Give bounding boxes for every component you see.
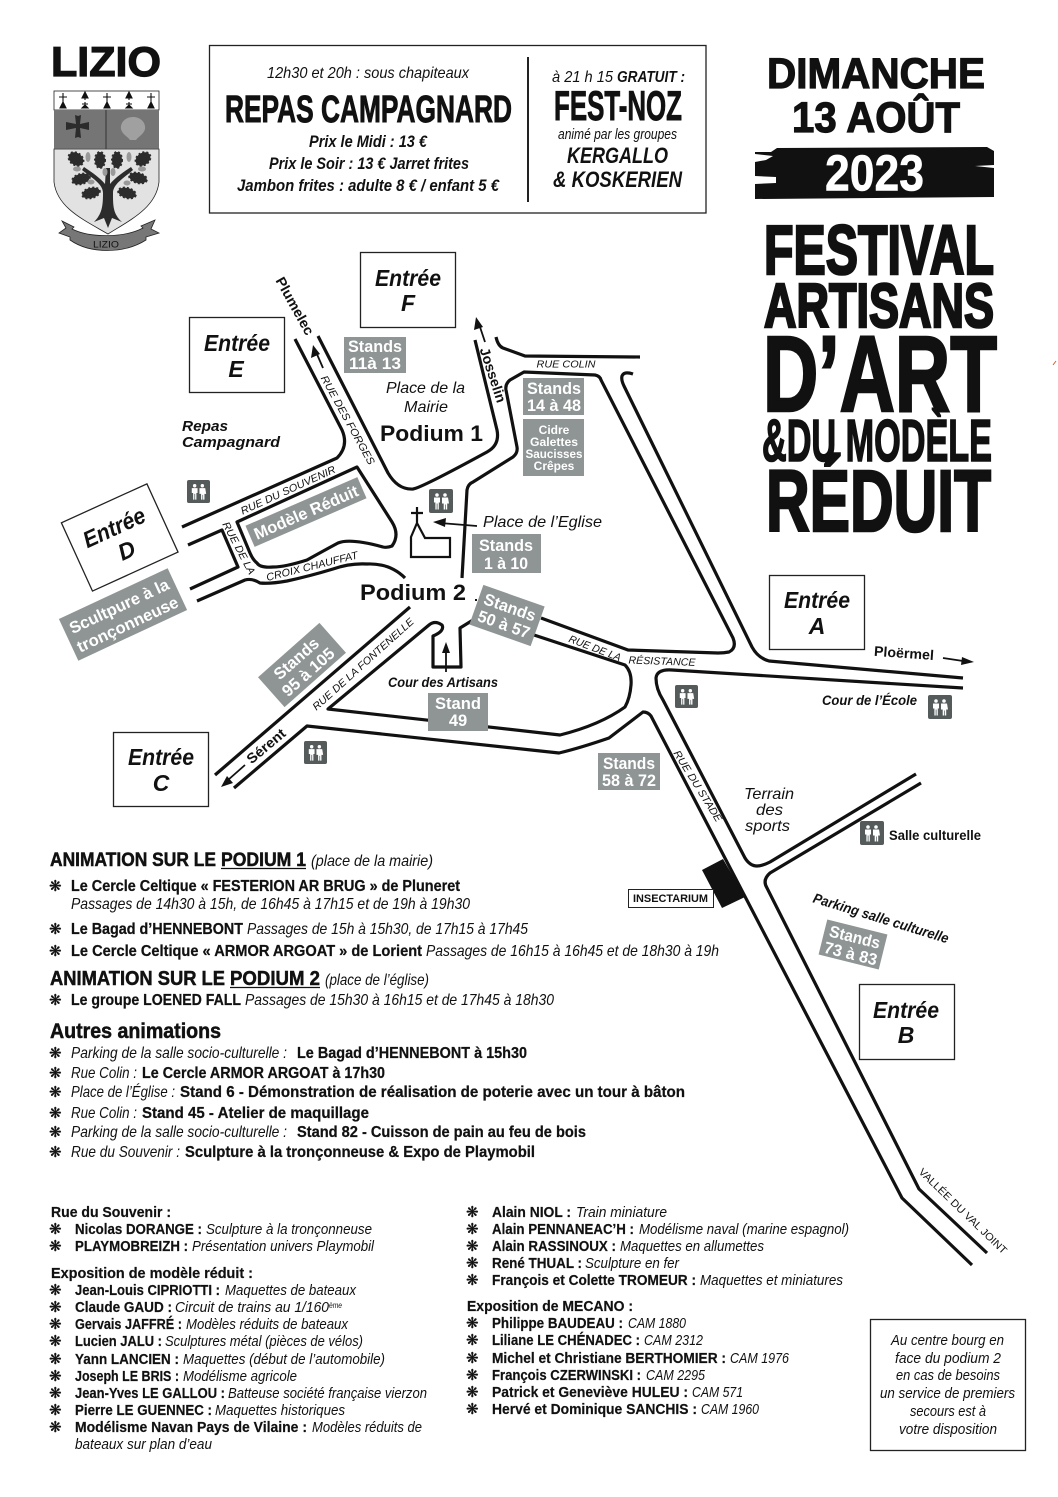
callout: first aid: Au centre bourg en — [890, 1333, 1004, 1349]
direction labels: Ploërmel — [874, 643, 934, 663]
list: exposition de mecano: Patrick et Geneviève HULEU : — [492, 1385, 688, 1401]
section: autres animations: Rue du Souvenir : — [71, 1144, 180, 1161]
food stand: Crêpes — [534, 459, 575, 473]
section: autres animations: Le Cercle ARMOR ARGOAT à 17h30 — [142, 1065, 385, 1082]
stands 14 à 48 — [523, 378, 584, 415]
list: exposition de modèle réduit: ❋ — [49, 1367, 62, 1385]
list: rue du souvenir: ❋ — [49, 1237, 62, 1255]
street names: CROIX CHAUFFAT — [265, 549, 361, 584]
list: exposition de modèle réduit: ❋ — [49, 1401, 62, 1419]
list: exhibitors continued: Modélisme naval (marine espagnol) — [639, 1222, 849, 1238]
food stand — [523, 419, 584, 476]
section: autres animations: Rue Colin : — [71, 1065, 137, 1082]
list: exposition de modèle réduit: bateaux sur plan d’eau — [75, 1437, 212, 1453]
section: autres animations: ❋ — [49, 1123, 62, 1141]
list: exposition de modèle réduit: Circuit de trains au 1/160 — [175, 1300, 329, 1316]
section: animation podium 1: ❋ — [49, 942, 62, 960]
year banner: 2023 — [825, 144, 924, 202]
list: exhibitors continued: ❋ — [466, 1237, 479, 1255]
arrow: ploërmel — [943, 657, 974, 665]
list: rue du souvenir: Nicolas DORANGE : — [75, 1222, 202, 1238]
icon: coat of arms — [54, 91, 159, 250]
list: exposition de modèle réduit: Sculptures métal (pièces de vélos) — [165, 1334, 363, 1350]
list: exposition de mecano: CAM 571 — [692, 1385, 743, 1401]
list: exhibitors continued: François et Colette TROMEUR : — [492, 1273, 696, 1289]
section: autres animations: ❋ — [49, 1083, 62, 1101]
list: exposition de modèle réduit: Modélisme agricole — [183, 1369, 297, 1385]
stand 49: Stand — [435, 695, 481, 713]
insectarium: INSECTARIUM — [633, 893, 708, 905]
list: exposition de mecano: Philippe BAUDEAU : — [492, 1316, 623, 1332]
list: exhibitors continued: Train miniature — [576, 1205, 667, 1221]
entrance A: A — [808, 613, 825, 639]
arrow: cour des artisans — [442, 642, 450, 672]
stands 58 à 72 — [598, 753, 660, 790]
stand 49: 49 — [449, 712, 467, 730]
entrance E — [190, 318, 284, 392]
place labels: Podium 1 — [380, 421, 483, 446]
food stand: Galettes — [530, 435, 578, 449]
list: rue du souvenir: Rue du Souvenir : — [51, 1205, 171, 1221]
stands 50 à 57 — [469, 585, 545, 646]
section: autres animations: ❋ — [49, 1044, 62, 1062]
list: exposition de modèle réduit: ❋ — [49, 1350, 62, 1368]
stands 14 à 48: 14 à 48 — [527, 397, 581, 415]
icon: toilets rue du stade — [675, 685, 698, 708]
list: exposition de modèle réduit: Pierre LE GUENNEC : — [75, 1403, 212, 1419]
list: exposition de modèle réduit: ❋ — [49, 1281, 62, 1299]
panel: repas campagnard and fest-noz: Prix le Midi : 13 € — [309, 132, 428, 151]
section: autres animations: Stand 82 - Cuisson de pain au feu de bois — [297, 1124, 586, 1141]
date: 13 AOÛT — [792, 93, 960, 142]
year banner — [755, 144, 994, 202]
insectarium — [628, 859, 745, 908]
date: DIMANCHE — [767, 50, 985, 98]
section: animation podium 1: (place de la mairie) — [311, 853, 433, 870]
list: exposition de mecano: CAM 1960 — [701, 1402, 759, 1418]
direction labels — [243, 274, 934, 767]
list: exposition de modèle réduit: ❋ — [49, 1332, 62, 1350]
place labels: Parking salle culturelle — [811, 890, 951, 946]
list: exposition de mecano — [466, 1299, 790, 1418]
entrance E: Entrée — [204, 330, 270, 356]
stands 73 à 83: 73 à 83 — [822, 939, 879, 969]
icon: toilets cour de l'école — [928, 695, 952, 719]
town name: LIZIO — [51, 38, 161, 85]
section: animation podium 1: Le Cercle Celtique « ARMOR ARGOAT » de Lorient — [71, 943, 423, 960]
list: exhibitors continued: Maquettes et miniatures — [700, 1273, 843, 1289]
section: animation podium 1: Passages de 14h30 à 15h, de 16h45 à 17h15 et de 19h à 19h30 — [71, 896, 470, 913]
street names: RUE DES FORGES — [318, 374, 377, 467]
list: exhibitors continued: René THUAL : — [492, 1256, 582, 1272]
arrow: place de l'église — [433, 518, 477, 527]
stands 1 à 10: Stands — [479, 537, 533, 555]
entrance D: D — [114, 535, 140, 566]
callout: first aid: face du podium 2 — [895, 1351, 1001, 1367]
section: autres animations: Stand 6 - Démonstration de réalisation de poterie avec un tour à bâton — [180, 1084, 685, 1101]
icon: toilets salle culturelle — [860, 821, 884, 845]
section: animation podium 2: ANIMATION SUR LE — [50, 968, 225, 990]
list: exhibitors continued: Alain PENNANEAC’H : — [492, 1222, 634, 1238]
list: exposition de modèle réduit: Jean-Yves LE GALLOU : — [75, 1386, 225, 1402]
entrance D: Entrée — [79, 502, 150, 553]
sculpture à la tronçonneuse: tronçonneuse — [74, 594, 182, 656]
list: exposition de mecano: CAM 1880 — [628, 1316, 686, 1332]
list: rue du souvenir: Sculpture à la tronçonneuse — [206, 1222, 372, 1238]
entrance E: E — [228, 356, 244, 382]
stands 73 à 83 — [818, 920, 887, 970]
section: animation podium 1: Passages de 15h à 15h30, de 17h15 à 17h45 — [247, 921, 528, 938]
street names: RUE DU STADE — [671, 748, 725, 825]
panel: repas campagnard and fest-noz: FEST-NOZ — [554, 82, 682, 129]
section: animation podium 1: ❋ — [49, 877, 62, 895]
food stand: Cidre — [539, 423, 570, 437]
list: exposition de modèle réduit: Modélisme Navan Pays de Vilaine : — [75, 1420, 307, 1436]
place labels: Podium 2 — [360, 580, 466, 605]
section: animation podium 2 — [49, 968, 554, 1009]
panel: repas campagnard and fest-noz: KERGALLO — [567, 143, 668, 168]
list: exposition de mecano: Michel et Christiane BERTHOMIER : — [492, 1351, 726, 1367]
ribbon — [59, 220, 159, 250]
section: autres animations: ❋ — [49, 1143, 62, 1161]
list: exposition de mecano: ❋ — [466, 1331, 479, 1349]
list: exposition de modèle réduit: Batteuse société française vierzon — [228, 1386, 427, 1402]
food stand: Saucisses — [526, 447, 583, 461]
arrow: josselin — [474, 317, 485, 342]
street names: RÉSISTANCE — [628, 654, 697, 669]
panel: repas campagnard and fest-noz: Prix le Soir : 13 € Jarret frites — [269, 154, 469, 173]
section: autres animations: ❋ — [49, 1064, 62, 1082]
section: animation podium 1: Passages de 16h15 à 16h45 et de 18h30 à 19h — [426, 943, 719, 960]
place labels: Terrain — [744, 786, 794, 803]
section: autres animations: ❋ — [49, 1104, 62, 1122]
place labels: sports — [745, 818, 790, 835]
panel: repas campagnard and fest-noz: 12h30 et 20h : sous chapiteaux — [267, 65, 470, 82]
section: animation podium 2: Passages de 15h30 à 16h15 et de 17h45 à 18h30 — [245, 992, 554, 1009]
section: animation podium 2: ❋ — [49, 991, 62, 1009]
list: exhibitors continued: Alain NIOL : — [492, 1205, 571, 1221]
street names: RUE DE LA — [567, 633, 623, 664]
entrance B: B — [898, 1022, 914, 1048]
date — [767, 50, 985, 142]
list: exhibitors continued: ❋ — [466, 1203, 479, 1221]
panel: repas campagnard and fest-noz: REPAS CAMPAGNARD — [225, 89, 512, 131]
stands 11 à 13 — [344, 337, 406, 373]
callout: first aid: un service de premiers — [880, 1386, 1015, 1402]
list: exposition de mecano: CAM 1976 — [730, 1351, 790, 1367]
roads — [182, 336, 987, 1265]
list: exposition de modèle réduit: Maquettes (début de l’automobile) — [183, 1352, 385, 1368]
panel: repas campagnard and fest-noz — [210, 46, 706, 213]
place labels: Place de l’Eglise — [483, 514, 602, 531]
list: exposition de modèle réduit: ❋ — [49, 1298, 62, 1316]
icon: toilets sérent — [304, 741, 327, 764]
place labels: Repas — [182, 418, 228, 435]
list: exposition de mecano: Liliane LE CHÉNADEC : — [492, 1332, 640, 1349]
entrance A — [770, 576, 864, 650]
street names — [219, 359, 1010, 1257]
modèle réduit: Modèle Réduit — [251, 482, 362, 544]
list: exposition de modèle réduit — [49, 1266, 427, 1453]
list: exposition de modèle réduit: ❋ — [49, 1315, 62, 1333]
stands 95 à 105: Stands — [271, 634, 323, 684]
place labels: Campagnard — [182, 434, 281, 451]
stands 14 à 48: Stands — [527, 380, 581, 398]
icon: toilets repas — [187, 480, 210, 503]
list: exposition de modèle réduit: ❋ — [49, 1384, 62, 1402]
entrance C: Entrée — [128, 744, 194, 770]
list: exposition de modèle réduit: Maquettes historiques — [215, 1403, 345, 1419]
stands 95 à 105 — [258, 623, 346, 707]
section: animation podium 1: Le Cercle Celtique « FESTERION AR BRUG » de Pluneret — [71, 878, 461, 895]
list: exposition de modèle réduit: Exposition de modèle réduit : — [51, 1266, 253, 1282]
place labels: Cour de l’École — [822, 692, 917, 708]
list: rue du souvenir: PLAYMOBREIZH : — [75, 1239, 188, 1255]
street names: RUE COLIN — [537, 359, 596, 371]
arrow: plumelec — [311, 345, 323, 368]
place labels: Cour des Artisans — [388, 674, 498, 690]
panel: repas campagnard and fest-noz: & KOSKERIEN — [553, 167, 683, 192]
section: autres animations — [49, 1020, 685, 1161]
list: exhibitors continued: Alain RASSINOUX : — [492, 1239, 616, 1255]
callout: first aid: en cas de besoins — [896, 1368, 1000, 1384]
section: animation podium 1 — [49, 850, 719, 960]
list: exhibitors continued: Maquettes en allumettes — [620, 1239, 764, 1255]
entrance A: Entrée — [784, 587, 850, 613]
stands 73 à 83: Stands — [827, 923, 882, 953]
entrance B: Entrée — [873, 997, 939, 1023]
stands 50 à 57: 50 à 57 — [475, 607, 532, 642]
list: exposition de modèle réduit: ème — [329, 1301, 342, 1310]
icon: coat of arms: LIZIO — [93, 240, 119, 250]
panel: repas campagnard and fest-noz: animé par les groupes — [558, 127, 677, 143]
stands 1 à 10: 1 à 10 — [484, 555, 528, 573]
section: autres animations: Parking de la salle socio-culturelle : — [71, 1045, 287, 1062]
section: animation podium 2: PODIUM 2 — [230, 968, 320, 990]
section: autres animations: Parking de la salle socio-culturelle : — [71, 1124, 287, 1141]
place labels: Mairie — [404, 399, 448, 416]
stands 50 à 57: Stands — [481, 590, 538, 625]
section: autres animations: Place de l’Église : — [71, 1082, 175, 1101]
list: exhibitors continued: ❋ — [466, 1220, 479, 1238]
panel: repas campagnard and fest-noz: à 21 h 15 — [552, 69, 613, 86]
direction labels: Plumelec — [273, 274, 318, 338]
entrance D — [61, 484, 178, 591]
list: exposition de modèle réduit: ❋ — [49, 1418, 62, 1436]
street names: RUE DU SOUVENIR — [239, 464, 338, 517]
list: exhibitors continued: ❋ — [466, 1271, 479, 1289]
list: exhibitors continued: Sculpture en fer — [585, 1256, 680, 1272]
list: exposition de mecano: Hervé et Dominique SANCHIS : — [492, 1402, 697, 1418]
list: rue du souvenir — [49, 1205, 375, 1255]
section: animation podium 1: ANIMATION SUR LE — [50, 850, 216, 871]
entrance C: C — [153, 770, 170, 796]
list: exposition de modèle réduit: Lucien JALU : — [75, 1334, 162, 1350]
callout: first aid: votre disposition — [899, 1422, 997, 1438]
sculpture à la tronçonneuse: Scultpure à la — [67, 575, 173, 638]
stands 1 à 10 — [472, 534, 541, 573]
stands 11 à 13: 11à 13 — [349, 355, 401, 373]
place labels: Place de la — [386, 380, 465, 397]
list: exposition de modèle réduit: Joseph LE BRIS : — [75, 1369, 179, 1385]
list: exposition de mecano: François CZERWINSKI : — [492, 1368, 641, 1384]
list: exposition de modèle réduit: Modèles réduits de — [312, 1420, 422, 1436]
list: exposition de modèle réduit: Modèles réduits de bateaux — [186, 1317, 349, 1333]
direction labels: Josselin — [477, 345, 510, 405]
callout: first aid: secours est à — [910, 1404, 986, 1420]
direction labels: Sérent — [243, 725, 289, 767]
panel: repas campagnard and fest-noz: Jambon frites : adulte 8 € / enfant 5 € — [237, 176, 500, 195]
stand 49 — [428, 693, 488, 731]
list: exposition de mecano: ❋ — [466, 1349, 479, 1367]
section: autres animations: Stand 45 - Atelier de maquillage — [142, 1105, 369, 1122]
section: autres animations: Sculpture à la tronçonneuse & Expo de Playmobil — [185, 1144, 535, 1161]
list: rue du souvenir: ❋ — [49, 1220, 62, 1238]
panel: repas campagnard and fest-noz: GRATUIT : — [617, 69, 685, 86]
street map — [59, 252, 1010, 1265]
section: animation podium 2: (place de l’église) — [325, 972, 429, 989]
section: animation podium 1: ❋ — [49, 920, 62, 938]
entrance C — [114, 732, 208, 806]
section: autres animations: Le Bagad d’HENNEBONT à 15h30 — [297, 1045, 527, 1062]
list: exposition de modèle réduit: Yann LANCIEN : — [75, 1352, 179, 1368]
callout: first aid — [870, 1320, 1026, 1450]
church — [411, 507, 450, 557]
list: exposition de mecano: CAM 2295 — [646, 1368, 706, 1384]
list: exposition de mecano: Exposition de MECANO : — [467, 1299, 633, 1315]
list: exhibitors continued — [466, 1203, 849, 1289]
place labels: Salle culturelle — [889, 827, 981, 843]
stands 58 à 72: 58 à 72 — [602, 772, 656, 790]
stands 11 à 13: Stands — [348, 338, 402, 356]
list: exposition de modèle réduit: Gervais JAFFRÉ : — [75, 1316, 182, 1333]
festival title — [762, 211, 997, 550]
list: exposition de mecano: ❋ — [466, 1314, 479, 1332]
section: animation podium 1: PODIUM 1 — [221, 850, 306, 871]
stands 95 à 105: 95 à 105 — [279, 645, 339, 700]
shield — [54, 149, 159, 234]
icon: toilets église — [429, 489, 453, 513]
section: autres animations: Autres animations — [50, 1020, 221, 1043]
list: exhibitors continued: ❋ — [466, 1254, 479, 1272]
section: animation podium 1: Le Bagad d’HENNEBONT — [71, 921, 243, 938]
entrance F: Entrée — [375, 265, 441, 291]
street names: VALLÉE DU VAL JOINT — [916, 1165, 1010, 1257]
list: exposition de modèle réduit: Claude GAUD : — [75, 1300, 172, 1316]
place labels: des — [756, 802, 783, 819]
list: exposition de modèle réduit: Maquettes de bateaux — [225, 1283, 357, 1299]
entrance B — [860, 984, 954, 1060]
sculpture à la tronçonneuse — [59, 568, 187, 661]
list: exposition de modèle réduit: Jean-Louis CIPRIOTTI : — [75, 1283, 220, 1299]
entrance F — [360, 252, 456, 328]
section: animation podium 2: Le groupe LOENED FALL — [71, 992, 241, 1009]
place labels — [182, 380, 981, 946]
list: rue du souvenir: Présentation univers Playmobil — [192, 1239, 375, 1255]
arrow: sérent — [221, 765, 245, 787]
list: exposition de mecano: ❋ — [466, 1383, 479, 1401]
list: exposition de mecano: ❋ — [466, 1400, 479, 1418]
list: exposition de mecano: ❋ — [466, 1366, 479, 1384]
list: exposition de mecano: CAM 2312 — [644, 1333, 703, 1349]
street names: RUE DE LA FONTENELLE — [310, 615, 417, 713]
section: autres animations: Rue Colin : — [71, 1105, 137, 1122]
street names: RUE DE LA — [219, 520, 257, 577]
entrance F: F — [401, 290, 416, 316]
stands 58 à 72: Stands — [603, 755, 655, 773]
